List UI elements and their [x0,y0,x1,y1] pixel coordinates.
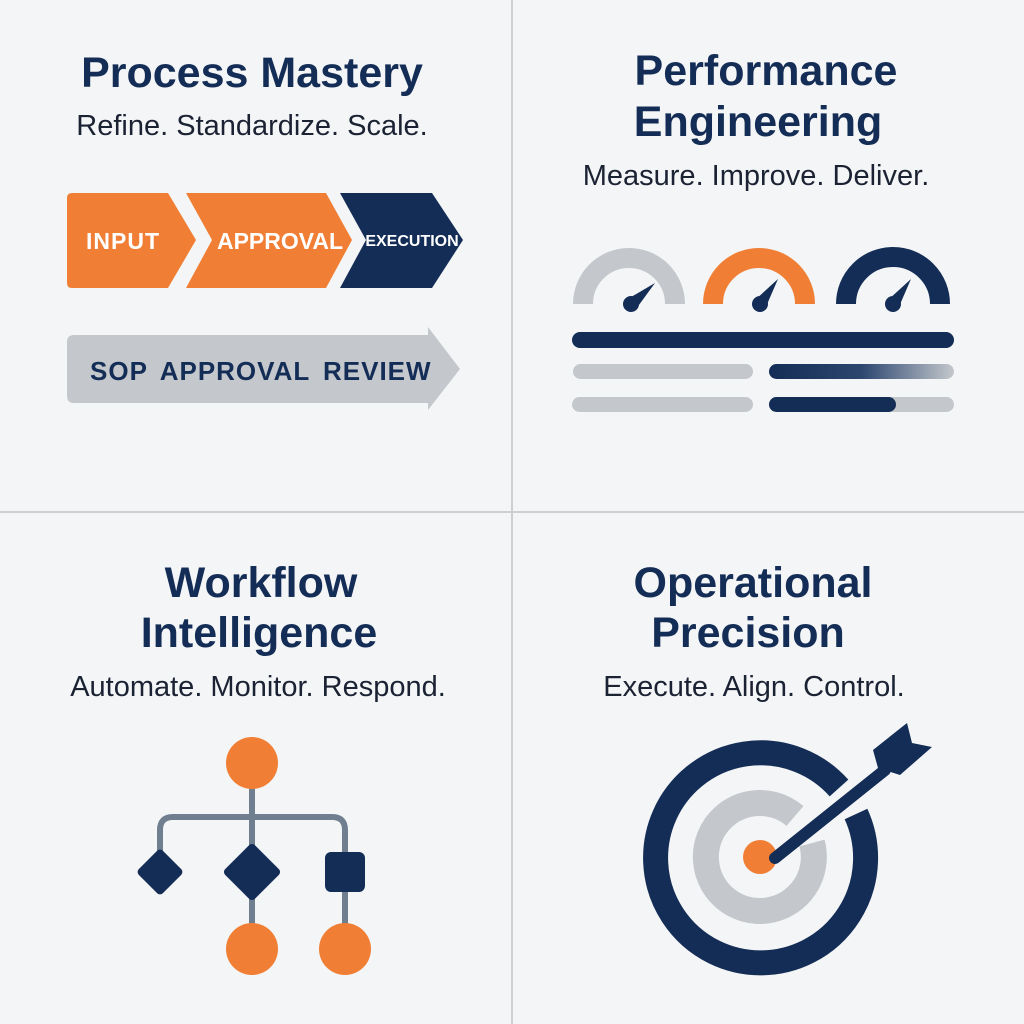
chevron: execution: EXECUTION [365,233,459,250]
chevron: approval: APPROVAL [217,228,343,254]
subtitle: Execute. Align. Control. [603,671,905,703]
gray arrow: SOP approval review: SOP APPROVAL REVIEW [90,356,432,386]
panel: performance engineering [572,47,954,412]
panel: operational precision: Precision [651,609,845,657]
chevron: input: INPUT [86,228,160,254]
chevron: input [67,193,196,288]
panel: operational precision [603,559,932,963]
title: Process Mastery: Process Mastery [81,49,423,97]
title: Performance Engineering: Performance [635,47,897,95]
title: Workflow [165,559,358,607]
subtitle: Measure. Improve. Deliver. [583,160,929,192]
panel: process mastery [67,49,463,410]
chevron: approval [186,193,352,288]
title: Operational [634,559,872,607]
chevron: execution [340,193,463,288]
gray arrow: SOP approval review [67,327,460,410]
flowchart [136,737,371,975]
target icon [656,723,932,963]
panel: performance engineering: Engineering [634,98,882,146]
panel: workflow intelligence [70,559,446,975]
gauges [583,257,940,304]
panel: workflow intelligence: Intelligence [141,609,377,657]
subtitle: Automate. Monitor. Respond. [70,671,446,703]
subtitle: Refine. Standardize. Scale.: Refine. Standardize. Scale. [76,110,428,142]
